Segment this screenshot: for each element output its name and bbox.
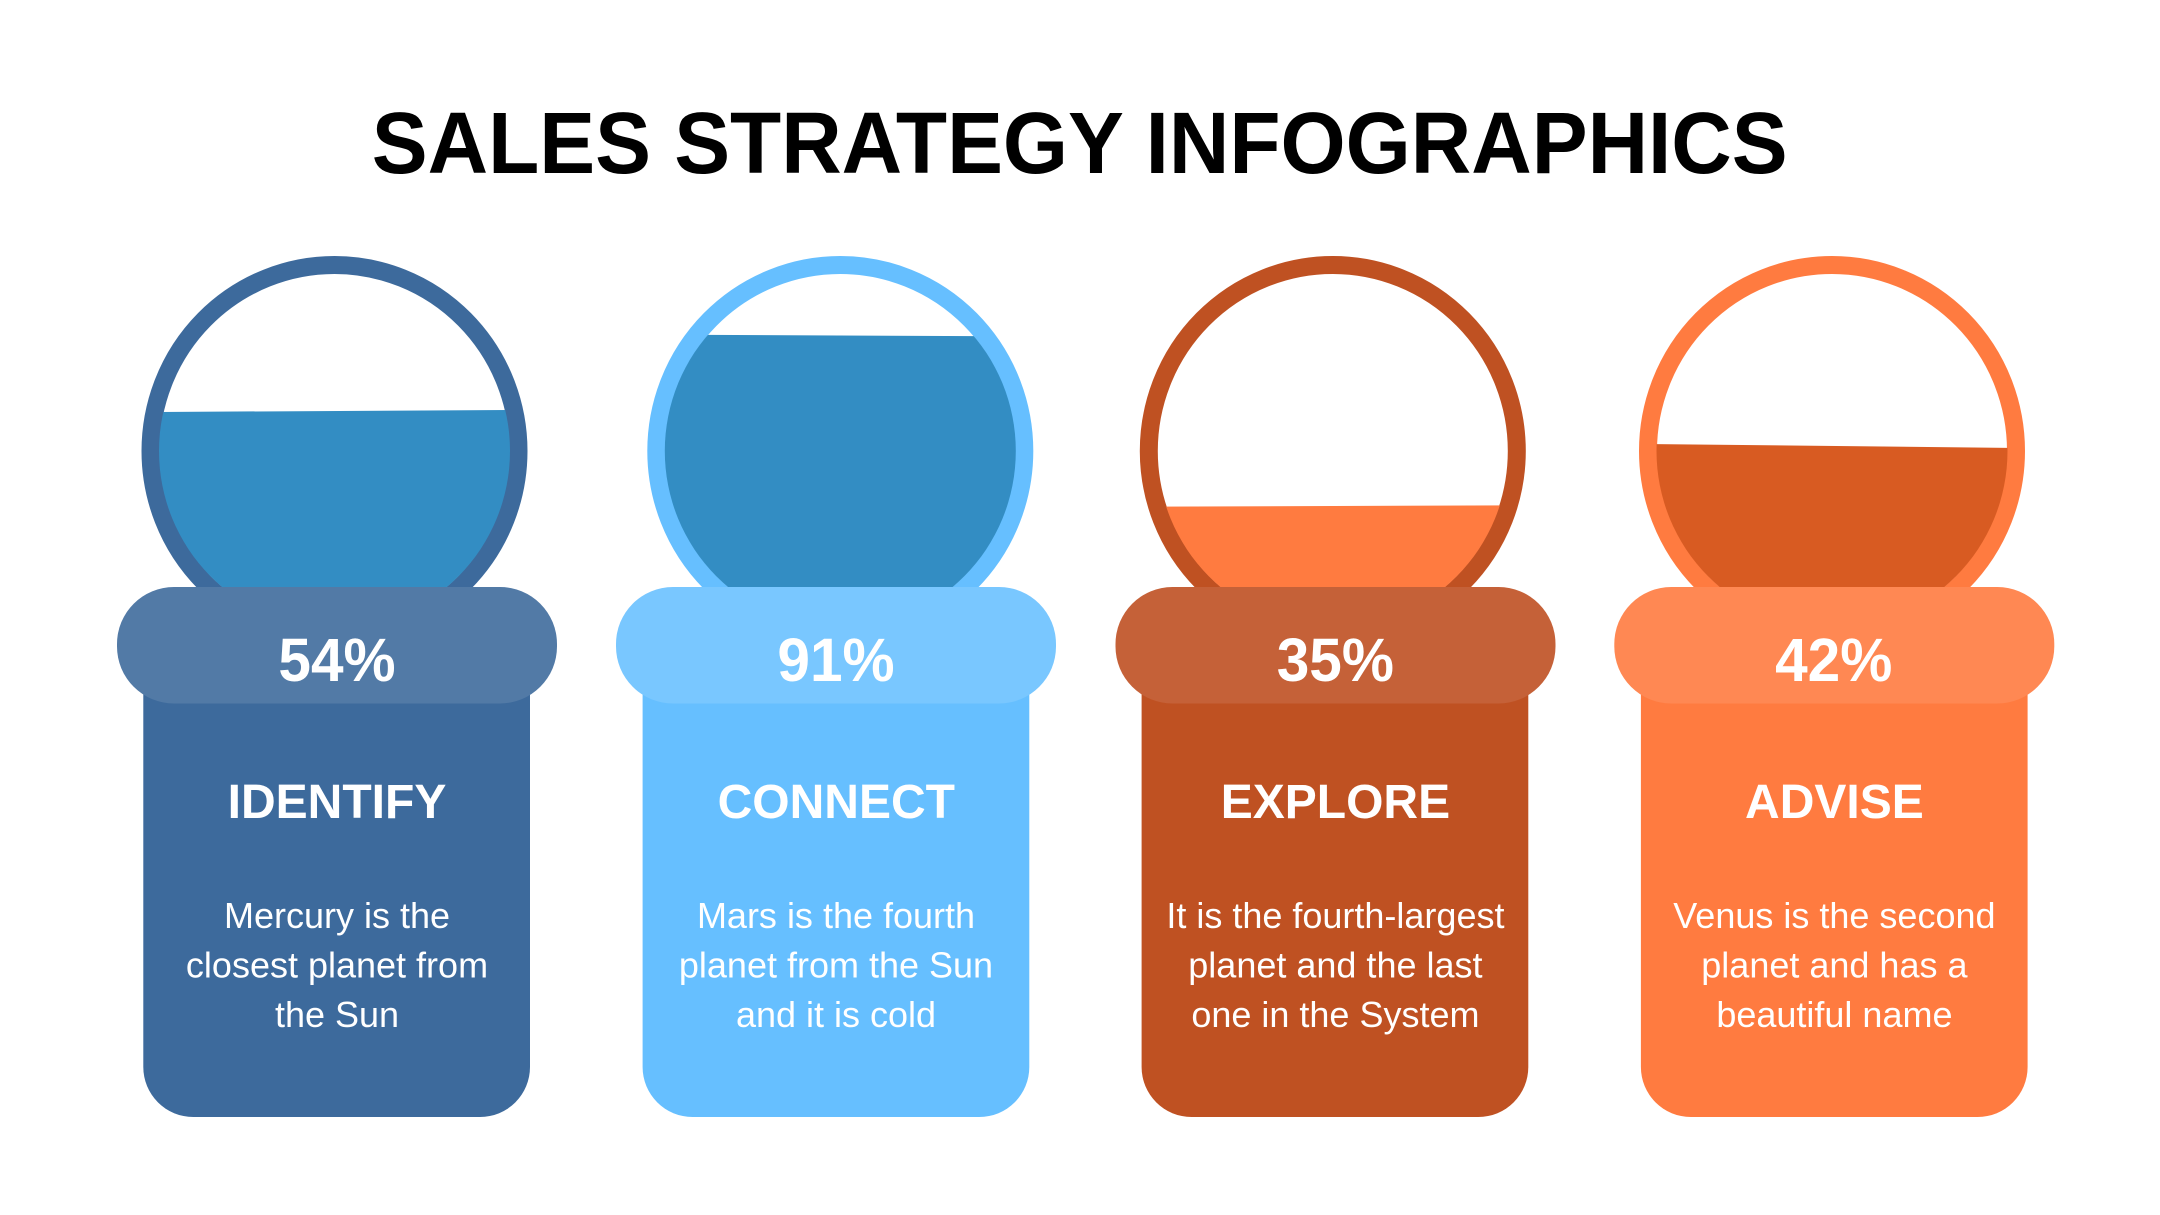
- panel: advise: [1614, 265, 2054, 1117]
- heading: CONNECT: [718, 776, 955, 829]
- percent pill: 35%: [1277, 626, 1394, 694]
- description: beautiful name: [1716, 994, 1952, 1035]
- card body: [643, 640, 1029, 1117]
- percent pill: [1116, 587, 1556, 704]
- gauge: 35%: [1148, 265, 1518, 640]
- percent pill: 54%: [278, 626, 396, 694]
- description: Venus is the second: [1673, 895, 1996, 936]
- heading: ADVISE: [1745, 776, 1924, 829]
- panel: explore: [1116, 265, 1556, 1117]
- gauge: 91%: [655, 265, 1026, 640]
- card body: [143, 640, 530, 1117]
- description: planet and has a: [1701, 944, 1968, 986]
- percent pill: 91%: [777, 626, 895, 694]
- panel: identify: [117, 265, 557, 1117]
- description: It is the fourth-largest: [1166, 895, 1504, 936]
- heading: EXPLORE: [1221, 776, 1450, 829]
- description: one in the System: [1191, 994, 1479, 1035]
- description: the Sun: [275, 994, 399, 1035]
- percent pill: [1614, 587, 2054, 704]
- description: planet and the last: [1188, 944, 1483, 986]
- title: SALES STRATEGY INFOGRAPHICS: [372, 96, 1788, 192]
- heading: IDENTIFY: [228, 776, 446, 829]
- description: Mercury is the: [224, 895, 450, 936]
- card body: [1641, 640, 2028, 1117]
- description: closest planet from: [186, 944, 488, 986]
- gauge: 54%: [150, 265, 520, 640]
- gauge: 42%: [1646, 265, 2018, 640]
- description: planet from the Sun: [679, 944, 993, 986]
- description: and it is cold: [736, 994, 936, 1035]
- percent pill: [117, 587, 557, 704]
- percent pill: [616, 587, 1056, 704]
- panel: connect: [616, 265, 1056, 1117]
- percent pill: 42%: [1775, 626, 1892, 694]
- card body: [1142, 640, 1528, 1117]
- description: Mars is the fourth: [697, 895, 975, 936]
